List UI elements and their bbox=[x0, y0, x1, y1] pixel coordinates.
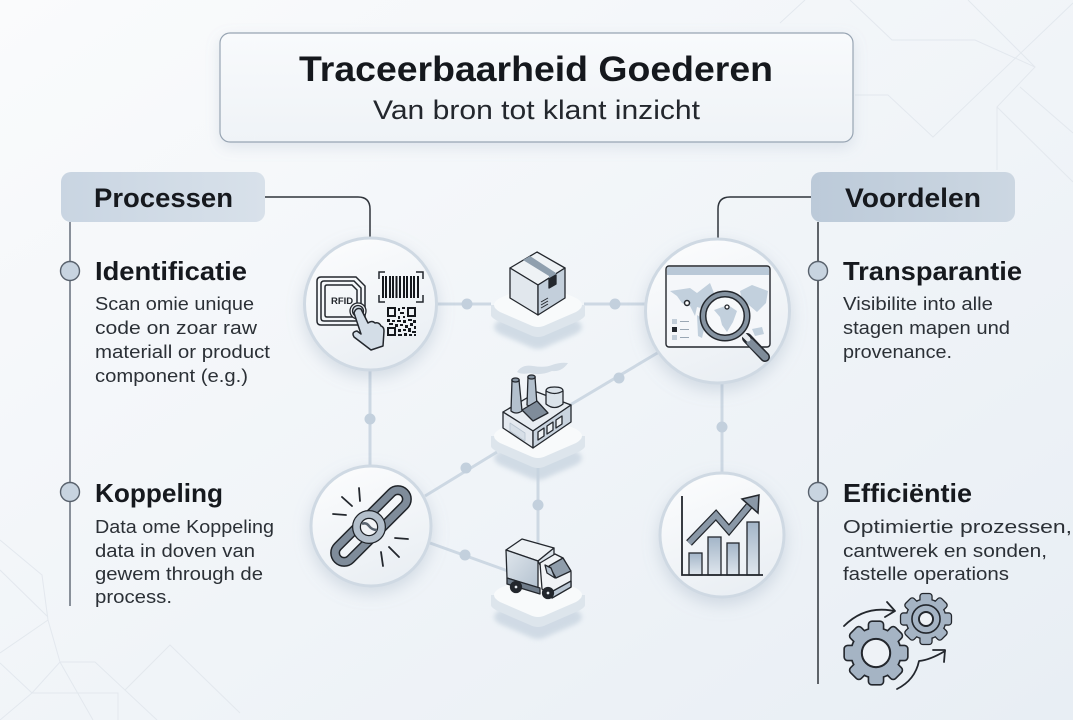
voordelen timeline bbox=[817, 222, 819, 684]
chain links bbox=[331, 486, 411, 566]
identificatie text: Identificatie bbox=[95, 256, 247, 286]
cycle arrows bbox=[844, 602, 945, 689]
bars bbox=[689, 522, 759, 575]
node: efficientie bbox=[808, 482, 828, 502]
identificatie text bbox=[95, 256, 270, 386]
transparantie text: Transparantie bbox=[843, 256, 1022, 286]
growth arrow bbox=[689, 495, 759, 543]
magnifier lens bbox=[703, 294, 747, 338]
efficientie text: Optimiertie prozessen, bbox=[843, 517, 1072, 537]
icon: pointing hand bbox=[350, 303, 384, 350]
processen timeline bbox=[69, 222, 71, 606]
axes bbox=[682, 496, 763, 575]
icon: box on platform bbox=[491, 252, 585, 349]
efficientie text: cantwerek en sonden, bbox=[843, 541, 1047, 561]
voordelen heading bbox=[811, 172, 1015, 222]
processen heading bbox=[61, 172, 265, 222]
panel: voordelen bbox=[718, 172, 1072, 684]
transparantie text: stagen mapen und bbox=[843, 318, 1010, 338]
panel: processen bbox=[60, 172, 370, 607]
koppeling text: gewem through de bbox=[95, 564, 263, 584]
map pin bbox=[684, 300, 690, 306]
identificatie text: Scan omie unique bbox=[95, 294, 254, 314]
voordelen connector bbox=[718, 197, 811, 238]
node: identificatie bbox=[60, 262, 80, 280]
chain centre ring bbox=[356, 514, 382, 540]
smoke bbox=[517, 363, 568, 374]
factory building bbox=[503, 375, 571, 448]
voordelen heading: Voordelen bbox=[845, 183, 981, 213]
icon: truck on platform bbox=[491, 539, 585, 639]
transparantie text: Visibilite into alle bbox=[843, 294, 993, 314]
node: koppeling bbox=[60, 482, 80, 502]
icon: barcode bbox=[379, 272, 423, 302]
koppeling text: data in doven van bbox=[95, 541, 255, 561]
node: transparantie bbox=[808, 262, 828, 280]
icon: factory on platform bbox=[491, 363, 585, 480]
browser title bar bbox=[667, 267, 769, 275]
koppeling text: Koppeling bbox=[95, 478, 223, 508]
identificatie text: component (e.g.) bbox=[95, 366, 248, 386]
transparantie text: provenance. bbox=[843, 342, 952, 362]
small gear bbox=[901, 594, 951, 644]
efficientie text: fastelle operations bbox=[843, 564, 1009, 584]
title: Traceerbaarheid Goederen bbox=[299, 50, 773, 89]
koppeling text: Data ome Koppeling bbox=[95, 517, 274, 537]
icon: growth chart circle bbox=[660, 473, 784, 597]
delivery truck bbox=[506, 539, 571, 598]
sparks bbox=[333, 488, 408, 566]
koppeling text: process. bbox=[95, 587, 172, 607]
icon: gears with arrows bbox=[844, 594, 951, 689]
icon: map magnifier circle bbox=[646, 239, 790, 383]
cardboard box bbox=[510, 252, 565, 315]
icon: RFID chip: RFID bbox=[331, 296, 353, 307]
magnifier handle bbox=[743, 334, 765, 357]
map legend bbox=[672, 319, 689, 340]
icon: QR code bbox=[387, 307, 416, 336]
icon: RFID barcode QR circle bbox=[304, 238, 436, 370]
title box bbox=[220, 33, 853, 142]
processen heading: Processen bbox=[94, 183, 233, 213]
identificatie text: materiall or product bbox=[95, 342, 270, 362]
efficientie text bbox=[843, 478, 1072, 584]
koppeling text bbox=[95, 478, 274, 607]
efficientie text: Efficiëntie bbox=[843, 478, 972, 508]
icon: chain link circle bbox=[311, 466, 431, 586]
large gear bbox=[845, 622, 907, 684]
transparantie text bbox=[843, 256, 1022, 362]
processen connector bbox=[265, 197, 370, 237]
connectors network bbox=[364, 298, 728, 571]
browser window bbox=[666, 266, 770, 347]
subtitle: Van bron tot klant inzicht bbox=[373, 95, 701, 125]
identificatie text: code on zoar raw bbox=[95, 318, 258, 338]
world map bbox=[670, 283, 768, 338]
